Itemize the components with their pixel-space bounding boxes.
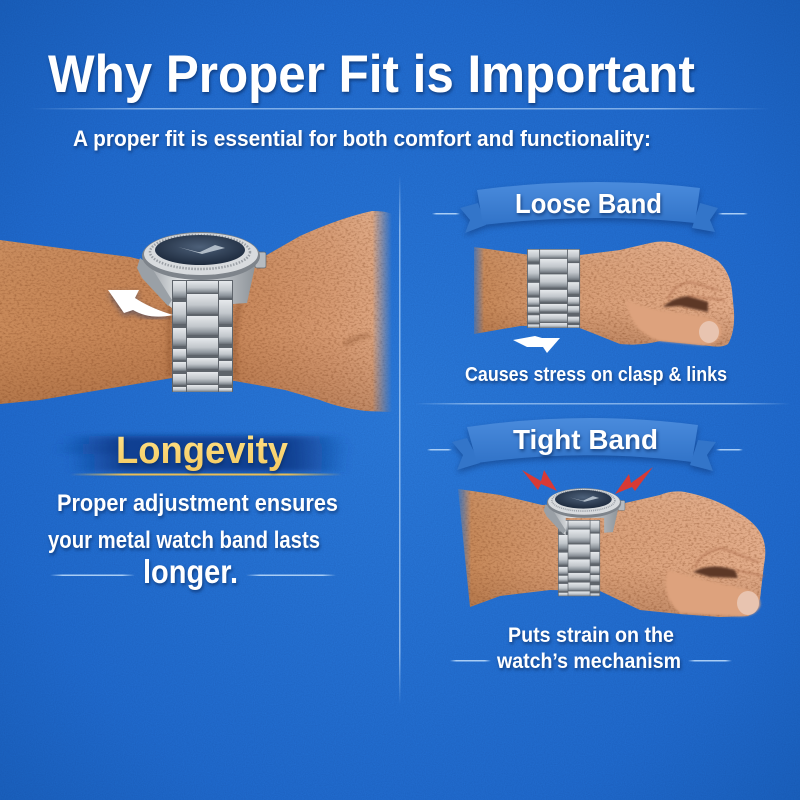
subtitle: A proper fit is essential for both comfort and functionality: (73, 126, 651, 151)
tight bracelet (558, 520, 600, 596)
large wrist photo with watch (0, 211, 392, 412)
finger creases (695, 548, 764, 576)
arrow: band slip (513, 336, 560, 353)
arrow: band direction (108, 290, 173, 317)
tight band ribbon (452, 418, 716, 471)
tight band caption: Puts strain on the (508, 624, 674, 647)
thumbnail (737, 591, 759, 615)
loose band ribbon: Loose Band (515, 188, 662, 219)
title: Why Proper Fit is Important (48, 45, 695, 104)
icon: left strain bolt (522, 470, 557, 491)
thumb (626, 300, 722, 345)
metal bracelet (172, 280, 233, 392)
loose band ribbon (460, 182, 718, 233)
icon: right strain bolt (615, 467, 653, 494)
wrist (0, 211, 392, 412)
longevity heading: Longevity (116, 430, 288, 472)
longevity heading (55, 430, 350, 476)
tight band ribbon: Tight Band (513, 424, 658, 455)
tight band caption (450, 624, 732, 673)
tight band wrist and hand (458, 488, 765, 617)
tight watch case (544, 488, 625, 535)
finger gap (663, 296, 708, 312)
loose bracelet (527, 249, 580, 328)
finger gap (693, 566, 738, 578)
finger creases (668, 282, 724, 300)
arm and fist (474, 242, 734, 347)
thumb (666, 570, 760, 616)
thumbnail (699, 321, 719, 343)
tight band caption: watch’s mechanism (496, 650, 681, 673)
longevity description: longer. (143, 553, 238, 590)
longevity description (48, 490, 338, 590)
loose band caption: Causes stress on clasp & links (465, 364, 727, 386)
arm and fist (458, 489, 765, 617)
loose band wrist and hand (474, 242, 734, 347)
watch case (137, 232, 266, 308)
longevity description: Proper adjustment ensures (57, 490, 338, 517)
longevity description: your metal watch band lasts (48, 527, 320, 554)
